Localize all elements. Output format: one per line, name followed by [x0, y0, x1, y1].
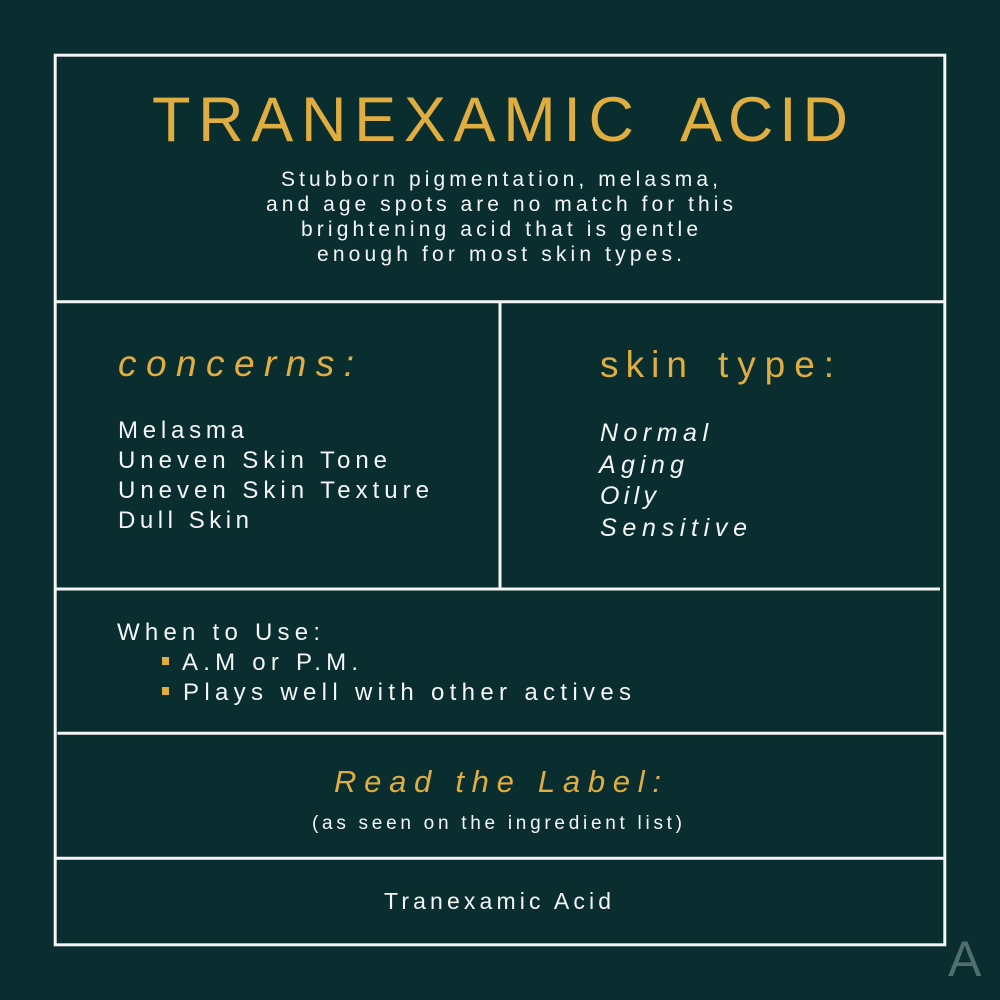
title: ACID [680, 85, 848, 155]
when to use heading: When to Use: [117, 619, 320, 646]
concerns list: Uneven Skin Tone [118, 447, 387, 474]
skin type heading: type: [718, 344, 834, 385]
panel: read the label [312, 764, 682, 834]
frame: outer border and dividers [55, 55, 945, 945]
skin type list: Oily [600, 482, 658, 510]
intro text block [266, 168, 733, 266]
panel: when to use [117, 619, 631, 706]
read the label heading: Read the Label: [334, 764, 661, 799]
ingredient name text: Tranexamic Acid [384, 888, 611, 914]
ingredient list note: (as seen on the ingredient list) [312, 813, 682, 834]
skin type heading [600, 344, 834, 385]
concerns list: Dull Skin [118, 507, 249, 534]
bullet: plays well with other actives: Plays well with other actives [183, 679, 631, 706]
bullet: A.M or P.M.: A.M or P.M. [182, 649, 358, 676]
panel: concerns [118, 343, 429, 534]
panel: header [152, 85, 848, 266]
watermark: letter A: A [948, 931, 982, 987]
title [152, 85, 848, 155]
panel: skin type [597, 344, 834, 542]
intro text block: Stubborn pigmentation, melasma, [281, 168, 718, 191]
concerns list: Melasma [118, 417, 245, 444]
skin type list [597, 419, 747, 542]
concerns list [118, 417, 429, 534]
skin type list: Normal [600, 419, 709, 447]
skin type heading: skin [600, 344, 687, 385]
concerns list: Uneven Skin Texture [118, 477, 429, 504]
intro text block: brightening acid that is gentle [301, 218, 698, 241]
title: TRANEXAMIC [152, 85, 634, 155]
intro text block: enough for most skin types. [317, 243, 682, 266]
skin type list: Sensitive [600, 514, 747, 542]
intro text block: and age spots are no match for this [266, 193, 733, 216]
skin type list: Aging [597, 451, 684, 479]
concerns heading: concerns: [118, 343, 354, 384]
